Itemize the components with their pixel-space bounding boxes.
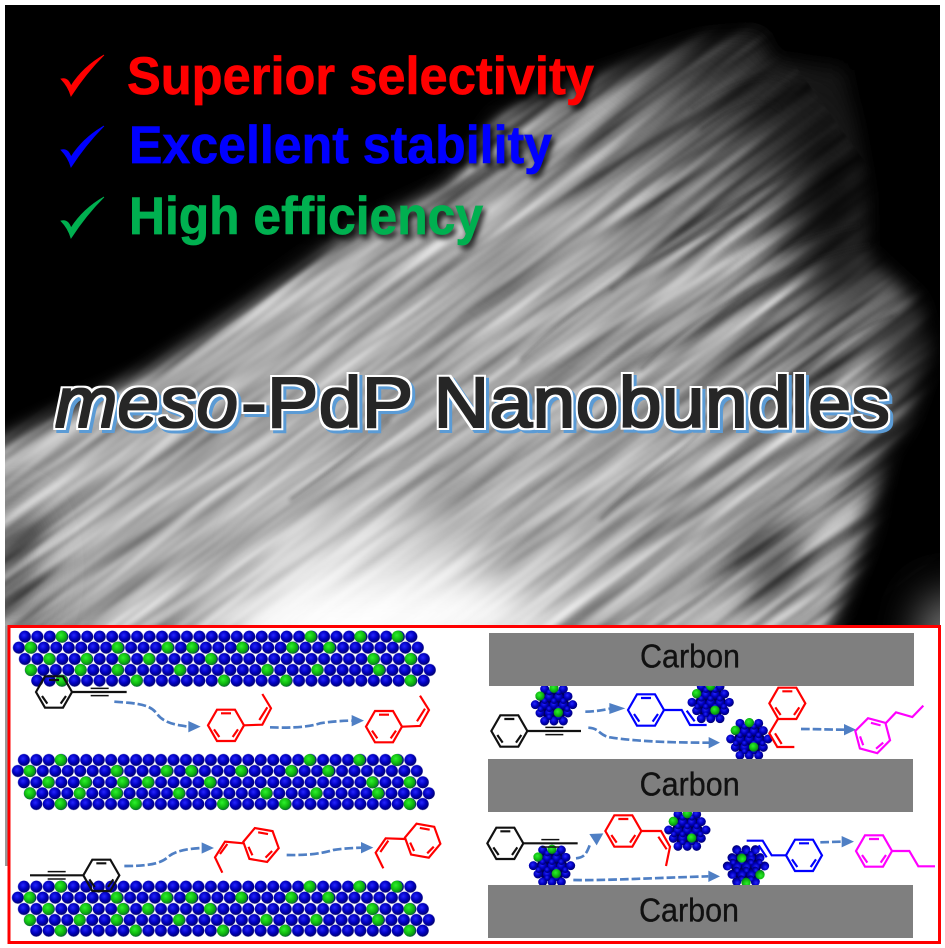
panel section: carbon supported nanoparticle pathways	[487, 633, 935, 938]
carbon layer top	[489, 633, 914, 686]
arrow: to alkane lower	[820, 836, 854, 847]
PdP nanowire top	[13, 630, 436, 687]
title: -PdP Nanobundles	[241, 364, 890, 443]
nanobundle streak texture	[5, 34, 922, 626]
molecule: alkane upper	[851, 706, 923, 755]
nanoparticle 2	[687, 681, 734, 723]
molecule: alkyne top	[36, 676, 127, 708]
check: excellent stability	[61, 126, 104, 167]
PdP nanowire middle	[12, 753, 435, 811]
molecule: trans alkene lower	[747, 840, 822, 871]
arrow: selective step	[270, 715, 364, 728]
check: high efficiency	[61, 197, 104, 238]
carbon layer top: Carbon	[640, 638, 740, 675]
molecule: alkyne lower	[487, 828, 578, 859]
feature: high efficiency: High efficiency	[129, 187, 483, 246]
carbon layer middle: Carbon	[640, 766, 740, 803]
PdP nanowire bottom	[12, 880, 435, 937]
arrow: alkyne to alkene	[114, 702, 201, 732]
molecule: cis alkene	[208, 694, 271, 741]
dark mesopore channels	[290, 78, 895, 520]
nanoparticle 4	[529, 845, 575, 886]
arrow: to alkane upper	[801, 724, 856, 735]
left image strip below the panel top	[5, 626, 8, 866]
molecule: cis alkene lower	[605, 815, 670, 866]
panel section: nanobundle pathways	[12, 630, 443, 937]
molecule: alkyne upper	[491, 715, 581, 747]
carbon layer bottom	[488, 885, 913, 938]
carbon layer bottom: Carbon	[639, 892, 739, 929]
molecule: trans alkene	[628, 694, 707, 726]
carbon layer middle	[488, 759, 913, 812]
nanoparticle 5	[664, 809, 710, 851]
molecule: alkene bottom	[215, 826, 281, 873]
text block: feature list	[61, 47, 594, 246]
feature: superior selectivity: Superior selectivity	[127, 47, 594, 106]
microscopy image background	[5, 5, 940, 626]
molecule: alkane lower	[856, 835, 935, 867]
nanoparticle 6	[723, 845, 769, 887]
arrow: to trans alkene lower	[573, 871, 720, 882]
arrow: to trans alkene	[585, 703, 625, 714]
nanoparticle 3	[726, 718, 772, 760]
molecule: alkene bottom product	[376, 822, 443, 868]
molecule: cis alkene product	[366, 696, 429, 742]
nanoparticle 1	[531, 684, 577, 725]
arrow: alkyne to alkene bottom	[124, 842, 214, 866]
arrow: to cis alkene	[588, 728, 720, 748]
panel: reaction schemes	[9, 626, 940, 942]
feature: excellent stability: Excellent stability	[129, 116, 552, 175]
molecule: cis alkene upper	[769, 688, 805, 747]
arrow: to cis alkene lower	[576, 833, 603, 858]
arrow: bottom selective step	[287, 842, 373, 855]
molecule: alkyne bottom	[30, 860, 119, 891]
title: meso	[55, 364, 238, 443]
check: superior selectivity	[61, 55, 104, 96]
